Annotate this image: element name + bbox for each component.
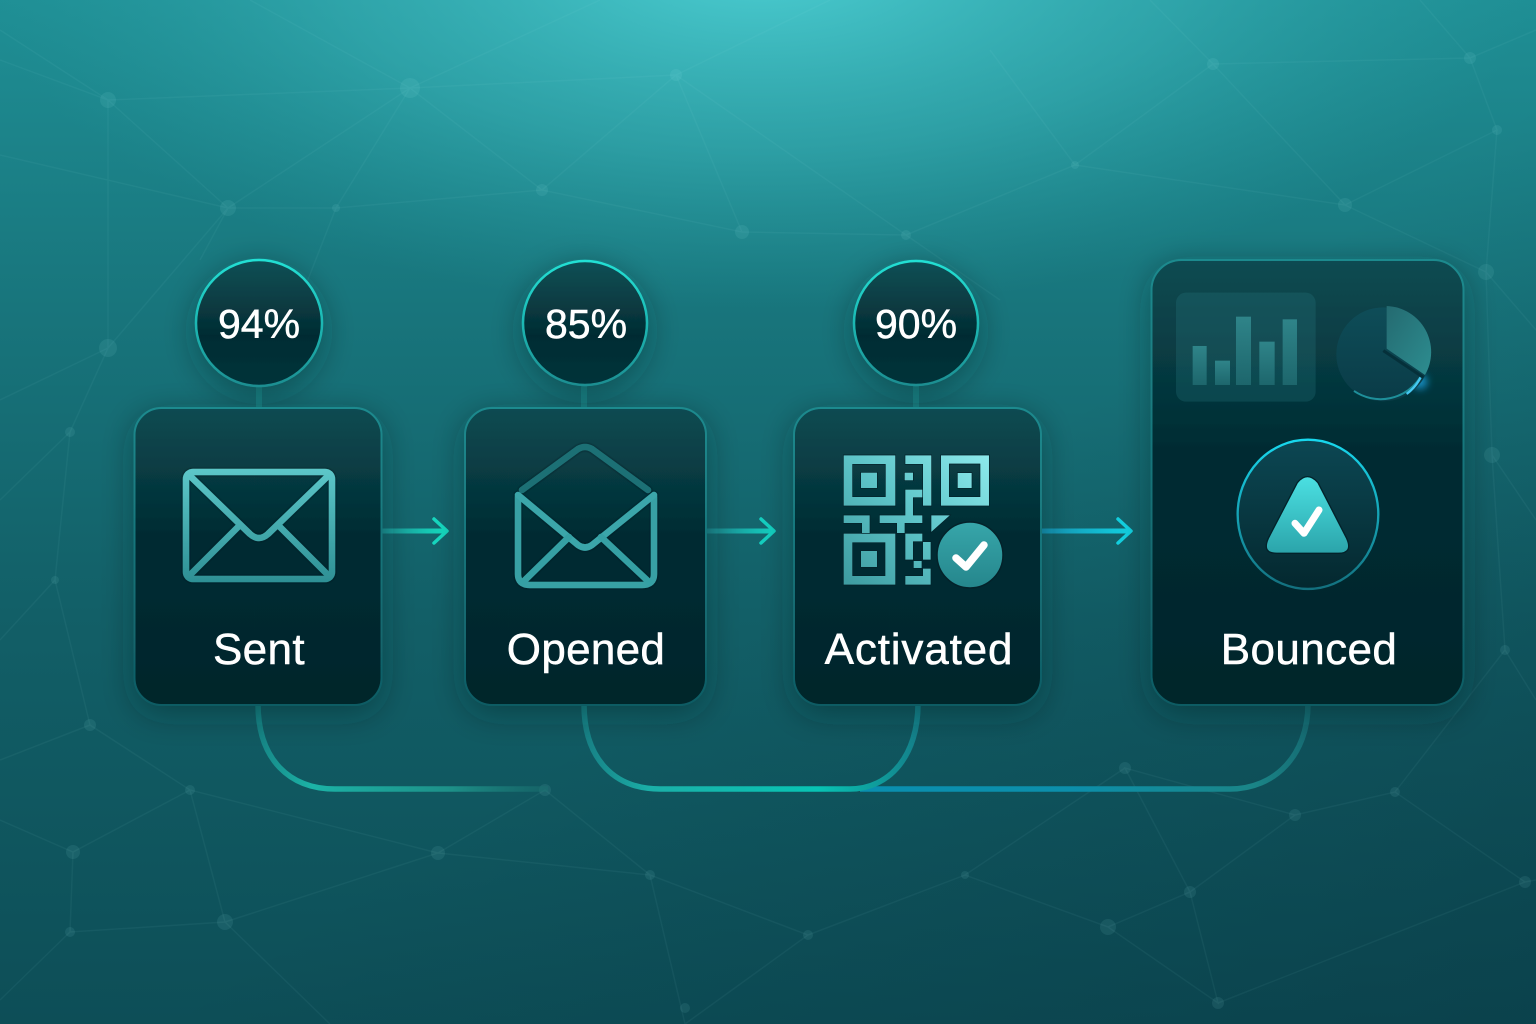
connector: opened to activated track: [584, 704, 918, 789]
panel: activated: [794, 408, 1041, 705]
icon: open envelope: [518, 447, 654, 585]
icon: closed envelope: [186, 472, 332, 579]
arrow: opened to activated: [707, 519, 774, 543]
connector: sent to lower track: [258, 704, 548, 789]
badge: 90%: 90%: [875, 301, 957, 347]
chart: bars: [1176, 293, 1316, 402]
badge: 90%: [854, 261, 978, 385]
label: bounced: Bounced: [1221, 625, 1397, 674]
label: activated: Activated: [825, 625, 1013, 674]
panel: sent: [134, 408, 382, 705]
icon: triangle check badge: [1238, 440, 1378, 589]
panel: bounced: [1152, 260, 1464, 705]
stem: activated: [913, 384, 919, 410]
chart: pie: [1336, 306, 1431, 401]
badge: 85%: [523, 261, 647, 385]
icon: QR code with check: [843, 455, 1003, 588]
badge: 85%: 85%: [545, 301, 627, 347]
label: sent: Sent: [213, 625, 305, 674]
badge: 94%: [196, 260, 322, 386]
panel: opened: [465, 408, 706, 705]
label: opened: Opened: [507, 625, 665, 674]
stem: opened: [581, 384, 587, 410]
stem: sent: [256, 384, 262, 410]
arrow: sent to opened: [382, 519, 447, 543]
arrow: activated to bounced: [1042, 519, 1131, 543]
badge: 94%: 94%: [218, 301, 300, 347]
connector: bounced return track: [860, 704, 1308, 789]
